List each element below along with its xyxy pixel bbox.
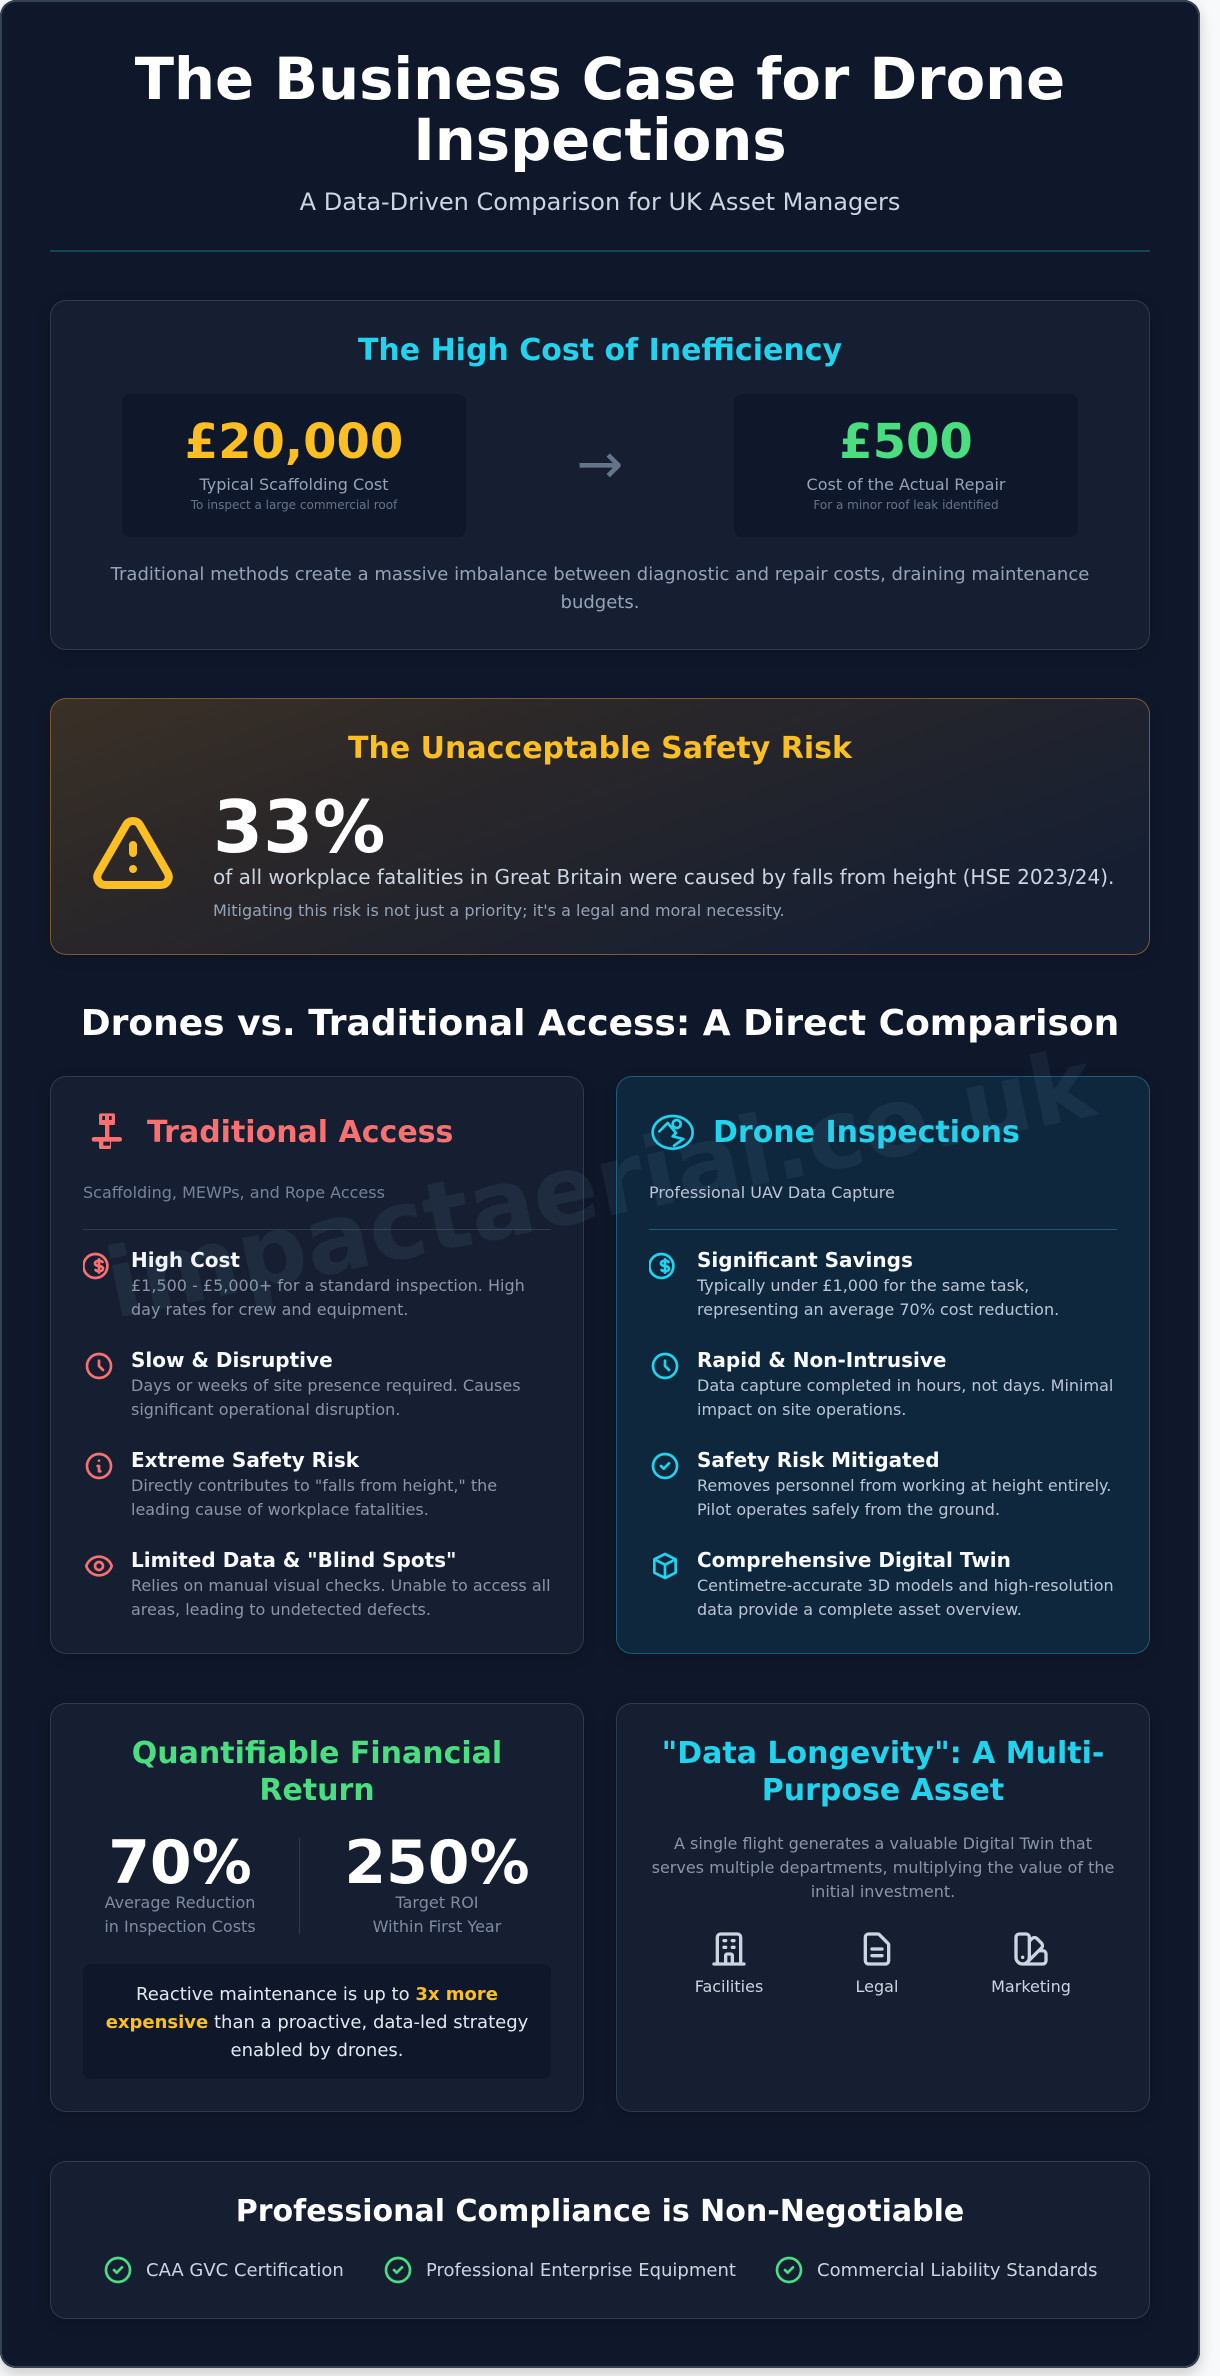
department: facilities xyxy=(695,1932,763,1996)
item text: Removes personnel from working at height entirely. xyxy=(697,1476,1111,1495)
item text xyxy=(131,1276,525,1319)
icon: scaffold xyxy=(92,1113,122,1149)
label: Marketing xyxy=(991,1977,1071,1996)
panel: safety risk xyxy=(50,698,1150,955)
label: CAA GVC Certification xyxy=(146,2260,344,2281)
stat: 70%: 70% xyxy=(108,1828,252,1898)
icon: check xyxy=(382,2254,414,2286)
item: savings xyxy=(649,1248,1059,1319)
callout text xyxy=(106,1984,528,2061)
icon: check xyxy=(102,2254,134,2286)
panel: drone inspections xyxy=(616,1076,1150,1654)
heading: financial return: Quantifiable Financial xyxy=(132,1736,502,1771)
stat note: To inspect a large commercial roof xyxy=(191,498,397,512)
item: safety mitigated xyxy=(652,1448,1111,1519)
panel: traditional access xyxy=(50,1076,584,1654)
stat divider xyxy=(299,1838,300,1934)
icon: drone xyxy=(651,1114,694,1150)
divider xyxy=(649,1229,1117,1230)
title: The Business Case for Drone xyxy=(135,46,1065,113)
paragraph: initial investment. xyxy=(811,1882,955,1900)
label: Commercial Liability Standards xyxy=(817,2260,1098,2281)
item text: Relies on manual visual checks. Unable to access all xyxy=(131,1576,551,1595)
stat: 250%: 250% xyxy=(344,1828,530,1898)
icon: eye xyxy=(85,1555,113,1577)
stat label: 250% xyxy=(373,1893,502,1936)
title: Inspections xyxy=(413,106,787,174)
item text: day rates for crew and equipment. xyxy=(131,1300,408,1319)
stat label: Typical Scaffolding Cost xyxy=(199,475,389,494)
item title: Comprehensive Digital Twin xyxy=(697,1548,1011,1572)
subtitle: A Data-Driven Comparison for UK Asset Managers xyxy=(300,188,900,216)
item text: impact on site operations. xyxy=(697,1400,906,1419)
heading: data longevity xyxy=(662,1736,1104,1808)
stat value: £20,000 xyxy=(185,414,403,470)
heading: traditional access: Traditional Access xyxy=(147,1115,453,1150)
header divider xyxy=(50,250,1150,252)
stat label: Cost of the Actual Repair xyxy=(807,475,1005,494)
item text xyxy=(697,1576,1114,1619)
stat card: repair cost xyxy=(734,394,1078,537)
heading: safety: The Unacceptable Safety Risk xyxy=(348,731,852,766)
paragraph: serves multiple departments, multiplying the value of the xyxy=(652,1858,1114,1876)
callout xyxy=(83,1964,551,2079)
item text xyxy=(131,1376,521,1419)
panel: financial return xyxy=(50,1703,584,2112)
item: slow xyxy=(86,1348,521,1419)
stat label: 250%: Target ROI xyxy=(395,1893,478,1912)
item: rapid xyxy=(652,1348,1113,1419)
heading: compliance: Professional Compliance is Non-Negotiable xyxy=(236,2194,964,2229)
subheading: Professional UAV Data Capture xyxy=(649,1183,895,1202)
icon: colour swatch xyxy=(1011,1929,1051,1969)
item title: Rapid & Non-Intrusive xyxy=(697,1348,946,1372)
callout text: Reactive maintenance is up to 3x more xyxy=(136,1984,498,2005)
item title: Slow & Disruptive xyxy=(131,1348,333,1372)
heading: financial return: Return xyxy=(259,1772,375,1808)
subheading: Scaffolding, MEWPs, and Rope Access xyxy=(83,1183,385,1202)
icon: check xyxy=(773,2254,805,2286)
heading: financial return xyxy=(132,1736,502,1808)
item: liability standards xyxy=(773,2254,1113,2286)
item text: Centimetre-accurate 3D models and high-resolution xyxy=(697,1576,1114,1595)
paragraph: Traditional methods create a massive imbalance between diagnostic and repair costs, draining maintenance xyxy=(111,564,1089,585)
heading: data longevity: Purpose Asset xyxy=(762,1772,1004,1808)
watermark: impactaerial.co.uk xyxy=(97,1027,1103,1341)
item title: Safety Risk Mitigated xyxy=(697,1448,940,1472)
icon: warning triangle xyxy=(93,817,173,889)
item text xyxy=(697,1476,1111,1519)
item title: Significant Savings xyxy=(697,1248,913,1272)
section heading: comparison: Drones vs. Traditional Access: A Direct Comparison xyxy=(81,1003,1119,1044)
stat label: 70%: Average Reduction xyxy=(105,1893,255,1912)
item text: significant operational disruption. xyxy=(131,1400,400,1419)
department: legal xyxy=(856,1932,898,1996)
item: CAA GVC xyxy=(102,2254,362,2286)
item text xyxy=(696,1276,1059,1319)
divider xyxy=(83,1229,551,1230)
stat label: 70% xyxy=(104,1893,256,1936)
item: safety xyxy=(86,1448,497,1519)
item text: data provide a complete asset overview. xyxy=(697,1600,1022,1619)
paragraph: budgets. xyxy=(561,592,639,613)
item text: £1,500 - £5,000+ for a standard inspection. High xyxy=(131,1276,525,1295)
label: Facilities xyxy=(695,1977,763,1996)
item text xyxy=(697,1376,1113,1419)
item text: Directly contributes to "falls from height," the xyxy=(131,1476,497,1495)
item text xyxy=(131,1476,497,1519)
arrow: → xyxy=(577,432,623,497)
icon: document xyxy=(864,1932,890,1966)
label: Legal xyxy=(856,1977,898,1996)
icon: clock xyxy=(86,1352,112,1380)
item text: areas, leading to undetected defects. xyxy=(131,1600,431,1619)
icon: cube xyxy=(652,1552,677,1580)
item text: Typically under £1,000 for the same task, xyxy=(697,1276,1029,1295)
icon: dollar xyxy=(83,1252,109,1280)
department: marketing xyxy=(991,1932,1071,1996)
icon: info xyxy=(86,1452,112,1480)
heading: high cost: The High Cost of Inefficiency xyxy=(358,333,842,368)
item: limited data xyxy=(85,1548,551,1619)
panel: data longevity xyxy=(616,1703,1150,2112)
heading: data longevity: "Data Longevity": A Multi- xyxy=(662,1736,1104,1771)
item text: Pilot operates safely from the ground. xyxy=(697,1500,1000,1519)
callout text: expensive than a proactive, data-led strategy xyxy=(106,2012,528,2033)
paragraph: A single flight generates a valuable Digital Twin that xyxy=(674,1834,1092,1852)
item text: Days or weeks of site presence required. Causes xyxy=(131,1376,521,1395)
item text: leading cause of workplace fatalities. xyxy=(131,1500,429,1519)
stat description: of all workplace fatalities in Great Britain were caused by falls from height (HSE 2023/24). xyxy=(213,865,1114,889)
icon: clock xyxy=(652,1352,678,1380)
title xyxy=(135,46,1065,174)
item text: representing an average 70% cost reduction. xyxy=(697,1300,1059,1319)
big stat 33%: 33% xyxy=(213,785,385,869)
stat note: Mitigating this risk is not just a priority; it's a legal and moral necessity. xyxy=(213,901,785,920)
item: enterprise equipment xyxy=(382,2254,742,2286)
stat card: scaffolding cost xyxy=(122,394,466,537)
item text xyxy=(131,1576,551,1619)
panel: compliance xyxy=(50,2161,1150,2319)
label: Professional Enterprise Equipment xyxy=(426,2260,736,2281)
stat value: £500 xyxy=(839,414,973,470)
callout text: enabled by drones. xyxy=(230,2040,404,2061)
item: high cost xyxy=(83,1248,525,1319)
heading: drone inspections: Drone Inspections xyxy=(713,1115,1020,1150)
paragraph xyxy=(652,1834,1114,1900)
item title: High Cost xyxy=(131,1248,240,1272)
icon: building xyxy=(712,1932,746,1966)
icon: dollar xyxy=(649,1252,675,1280)
panel: high cost of inefficiency xyxy=(50,300,1150,650)
item title: Limited Data & "Blind Spots" xyxy=(131,1548,456,1572)
stat label: 250%: Within First Year xyxy=(373,1917,501,1936)
icon: check circle xyxy=(652,1452,678,1480)
paragraph xyxy=(110,564,1089,613)
stat label: 70%: in Inspection Costs xyxy=(104,1917,256,1936)
item text: Data capture completed in hours, not days. Minimal xyxy=(697,1376,1113,1395)
stat note: For a minor roof leak identified xyxy=(813,498,999,512)
item: digital twin xyxy=(652,1548,1114,1619)
item title: Extreme Safety Risk xyxy=(131,1448,359,1472)
